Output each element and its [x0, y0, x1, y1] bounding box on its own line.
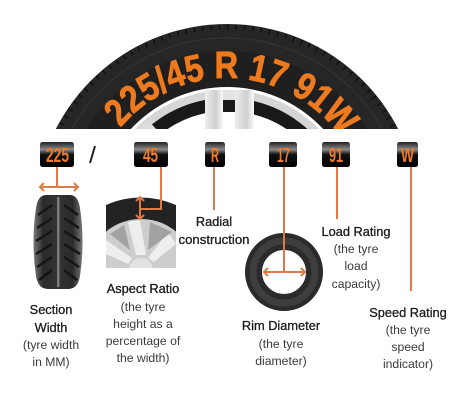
label: aspect ratio: the width) [117, 351, 169, 365]
code box: R [205, 142, 225, 167]
leader line and arrow: section width [40, 167, 78, 191]
code box: 17: 17 [277, 145, 290, 167]
label: speed rating [369, 305, 447, 371]
label: load rating: (the tyre [334, 242, 379, 256]
icon: tread tyre [34, 195, 82, 289]
leader line: radial [213, 167, 215, 210]
label: rim diameter: Rim Diameter [242, 318, 321, 333]
code box: 225 [40, 142, 74, 167]
leader line: load rating [336, 167, 338, 219]
leader line and arrow: rim diameter [264, 167, 305, 276]
alloy wheel rim [131, 87, 323, 129]
label: aspect ratio: (the tyre [121, 300, 166, 314]
label: aspect ratio: height as a [113, 317, 173, 331]
code box: W [397, 142, 418, 167]
label: speed rating: Speed Rating [369, 305, 447, 320]
leader line and arrow: aspect ratio [136, 167, 161, 219]
slash separator [90, 146, 95, 163]
label: rim diameter: diameter) [255, 354, 307, 368]
label: rim diameter: (the tyre [259, 337, 304, 351]
label: speed rating: indicator) [383, 357, 433, 371]
label: load rating: load [344, 259, 368, 273]
label: rim diameter [242, 318, 321, 368]
label: radial construction [178, 214, 250, 247]
label: speed rating: speed [391, 340, 425, 354]
label: section width: (tyre width [23, 338, 79, 352]
label: aspect ratio: percentage of [106, 334, 181, 348]
tyre size text: 225/45 R 17 91W [104, 51, 362, 129]
code box: 91 [322, 142, 350, 167]
label: radial construction: construction [178, 232, 250, 247]
code box: 225: 225 [46, 145, 69, 167]
code box: 45 [134, 142, 168, 167]
label: radial construction: Radial [196, 214, 232, 229]
main tyre with size marking [56, 24, 398, 129]
icon: wheel crop [106, 198, 176, 268]
label: aspect ratio: Aspect Ratio [107, 281, 179, 296]
label: section width: Width [35, 320, 67, 335]
label: load rating [321, 224, 391, 291]
code box: W: W [401, 145, 414, 167]
label: speed rating: (the tyre [386, 323, 431, 337]
code box: 17 [269, 142, 297, 167]
label: section width: Section [30, 302, 72, 317]
leader line: speed rating [410, 167, 412, 291]
label: section width: in MM) [32, 355, 70, 369]
code box: 91: 91 [329, 145, 343, 167]
icon: rim tyre ring [253, 241, 315, 303]
label: aspect ratio [106, 281, 181, 365]
label: load rating: capacity) [332, 277, 380, 291]
label: section width [23, 302, 79, 369]
code box: R: R [211, 145, 219, 167]
label: load rating: Load Rating [321, 224, 391, 239]
code box: 45: 45 [143, 145, 158, 167]
